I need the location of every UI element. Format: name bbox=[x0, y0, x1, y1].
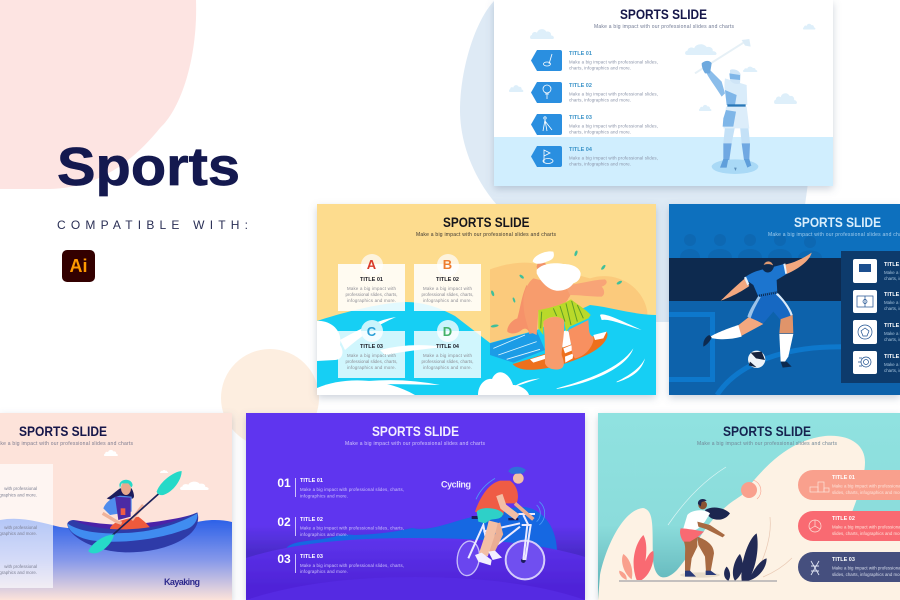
sand dunes bbox=[490, 263, 647, 350]
crowd silhouettes bbox=[680, 234, 822, 258]
main title: Sports bbox=[57, 137, 240, 197]
card D: professional slides, charts, bbox=[422, 359, 474, 364]
golf item 04: TITLE 04 bbox=[569, 147, 593, 153]
card D: Make a big impact with bbox=[423, 353, 473, 358]
panel: soccer slide bbox=[669, 204, 900, 395]
golf item 01: charts, infographics and more. bbox=[569, 66, 631, 70]
card D: TITLE 04 bbox=[436, 344, 460, 350]
item 03 bbox=[853, 320, 900, 344]
ball bbox=[741, 480, 761, 499]
translucent text panel: with professional bbox=[4, 486, 37, 491]
background hills bbox=[285, 507, 557, 565]
card B: Make a big impact with bbox=[423, 286, 473, 291]
card C: C bbox=[367, 324, 377, 339]
item 01 pill: TITLE 01 bbox=[832, 475, 855, 481]
label: Cycling: Cycling bbox=[441, 480, 471, 490]
card D: D bbox=[443, 324, 452, 339]
item 03 pill bbox=[798, 552, 900, 582]
item 03 pill: TITLE 03 bbox=[832, 557, 855, 563]
item 02 pill bbox=[798, 511, 900, 541]
card A: Make a big impact with bbox=[347, 286, 397, 291]
card C: Make a big impact with bbox=[347, 353, 397, 358]
golf item 02: charts, infographics and more. bbox=[569, 98, 631, 102]
golf item 01: Make a big impact with professional slides, bbox=[569, 60, 658, 64]
surf heading: SPORTS SLIDE bbox=[443, 214, 530, 230]
cream shape bbox=[598, 436, 900, 600]
volleyball heading: SPORTS SLIDE bbox=[723, 423, 811, 439]
item 01: 01 bbox=[277, 476, 291, 490]
foam bbox=[317, 317, 529, 395]
surf sea bbox=[317, 302, 656, 395]
pitch bbox=[669, 301, 900, 395]
illustration: navy plant bbox=[724, 533, 767, 581]
card B: professional slides, charts, bbox=[422, 292, 474, 297]
card A: professional slides, charts, bbox=[346, 292, 398, 297]
card A: infographics and more. bbox=[347, 298, 396, 303]
golf item 01 bbox=[531, 50, 658, 71]
goal box bbox=[669, 314, 712, 380]
translucent text panel: with professional bbox=[4, 525, 37, 530]
ground line bbox=[619, 580, 777, 582]
card C: professional slides, charts, bbox=[346, 359, 398, 364]
illustration: cyclist bbox=[455, 467, 545, 579]
card C: infographics and more. bbox=[347, 365, 396, 370]
item 02 bbox=[853, 290, 900, 313]
golf subtitle: Make a big impact with our professional slides and charts bbox=[594, 24, 734, 30]
stands band bbox=[669, 258, 841, 301]
item 01 pill: Make a big impact with professional bbox=[832, 484, 900, 488]
centre arc bbox=[715, 344, 841, 395]
clouds bbox=[509, 24, 815, 111]
icon: Adobe Illustrator badge: Ai bbox=[70, 256, 88, 276]
wave streaks bbox=[513, 314, 645, 389]
item 02: Make a big impact with professional slides, charts, bbox=[300, 526, 404, 530]
item 04 bbox=[853, 351, 900, 374]
water bbox=[0, 519, 232, 600]
cycling heading: SPORTS SLIDE bbox=[372, 423, 459, 439]
golf item 04: Make a big impact with professional slides, bbox=[569, 156, 658, 160]
item 02 pill: Make a big impact with professional bbox=[832, 524, 900, 530]
soccer heading: SPORTS SLIDE bbox=[794, 214, 881, 230]
golf item 03 bbox=[531, 114, 658, 135]
card A: A bbox=[367, 257, 377, 272]
item 01: infographics and more. bbox=[300, 494, 348, 498]
golf ground bbox=[494, 137, 833, 186]
card D bbox=[414, 320, 481, 378]
item 02: infographics and more. bbox=[300, 532, 348, 537]
card A bbox=[338, 254, 405, 311]
card B: TITLE 02 bbox=[436, 277, 459, 283]
card A: TITLE 01 bbox=[360, 277, 383, 283]
illustration: pink plant bbox=[619, 535, 654, 580]
item 03: 03 bbox=[277, 552, 291, 566]
sea accent bbox=[490, 331, 545, 363]
item 03 pill: Make a big impact with professional bbox=[832, 566, 900, 570]
panel: cycling slide bbox=[246, 413, 585, 600]
panel: surfing slide bbox=[317, 204, 656, 395]
illustration: volleyball player bbox=[680, 499, 730, 578]
item 02: TITLE 02 bbox=[300, 517, 323, 523]
golf item 03: Make a big impact with professional slides, bbox=[569, 124, 658, 128]
surf subtitle: Make a big impact with our professional slides and charts bbox=[416, 232, 556, 238]
card D: infographics and more. bbox=[423, 365, 472, 370]
kayak heading: SPORTS SLIDE bbox=[19, 423, 107, 439]
illustration: kayaker bbox=[67, 471, 198, 553]
item 01 bbox=[277, 476, 404, 498]
illustration: soccer player bbox=[703, 253, 812, 368]
translucent text panel bbox=[0, 464, 53, 588]
clouds bbox=[104, 450, 209, 490]
volleyball subtitle: Make a big impact with our professional slides and charts bbox=[697, 441, 838, 447]
item 01 pill bbox=[798, 470, 900, 500]
golf heading: SPORTS SLIDE bbox=[620, 6, 707, 22]
panel: golf slide bbox=[494, 0, 833, 186]
golf item 04: charts, infographics and more. bbox=[569, 162, 631, 166]
item 03: TITLE 03 bbox=[300, 554, 323, 560]
background blob: light blue bbox=[460, 0, 833, 322]
panel: kayaking slide bbox=[0, 413, 232, 600]
label: Kayaking: Kayaking bbox=[164, 577, 200, 587]
golf item 02: Make a big impact with professional slides, bbox=[569, 92, 658, 96]
panel: volleyball slide bbox=[598, 413, 900, 600]
icon: Adobe Illustrator badge bbox=[62, 250, 95, 282]
foreground hill bbox=[246, 577, 585, 600]
item 02: 02 bbox=[277, 515, 291, 529]
item 03 bbox=[277, 552, 404, 574]
translucent text panel: with professional bbox=[4, 564, 37, 569]
item 03: Make a big impact with professional slides, charts, bbox=[300, 563, 404, 568]
card B: B bbox=[443, 257, 452, 272]
item 01: TITLE 01 bbox=[300, 478, 323, 484]
item 02 bbox=[277, 515, 404, 537]
golf item 02: TITLE 02 bbox=[569, 83, 592, 89]
item 03: infographics and more. bbox=[300, 569, 348, 574]
golf item 03: charts, infographics and more. bbox=[569, 130, 631, 134]
info panel bbox=[841, 251, 900, 383]
cycling subtitle: Make a big impact with our professional slides and charts bbox=[345, 441, 486, 447]
golf item 03: TITLE 03 bbox=[569, 115, 592, 121]
middle hill band bbox=[246, 538, 585, 600]
illustration: surfer bbox=[490, 250, 623, 370]
item 01 bbox=[853, 259, 900, 283]
compatibility label: COMPATIBLE WITH: bbox=[57, 218, 248, 232]
illustration: golfer bbox=[695, 39, 758, 174]
card B: infographics and more. bbox=[423, 298, 472, 303]
card C bbox=[338, 320, 405, 378]
item 02 pill: TITLE 02 bbox=[832, 516, 855, 522]
item 01: Make a big impact with professional slides, charts, bbox=[300, 487, 404, 492]
golf item 01: TITLE 01 bbox=[569, 51, 592, 57]
background blob: pink bbox=[0, 0, 196, 189]
card B bbox=[414, 254, 481, 311]
motion lines bbox=[668, 467, 726, 525]
golf item 02 bbox=[531, 82, 658, 103]
background circle: peach bbox=[221, 349, 319, 447]
golf item 04 bbox=[531, 146, 658, 167]
card C: TITLE 03 bbox=[360, 344, 383, 350]
